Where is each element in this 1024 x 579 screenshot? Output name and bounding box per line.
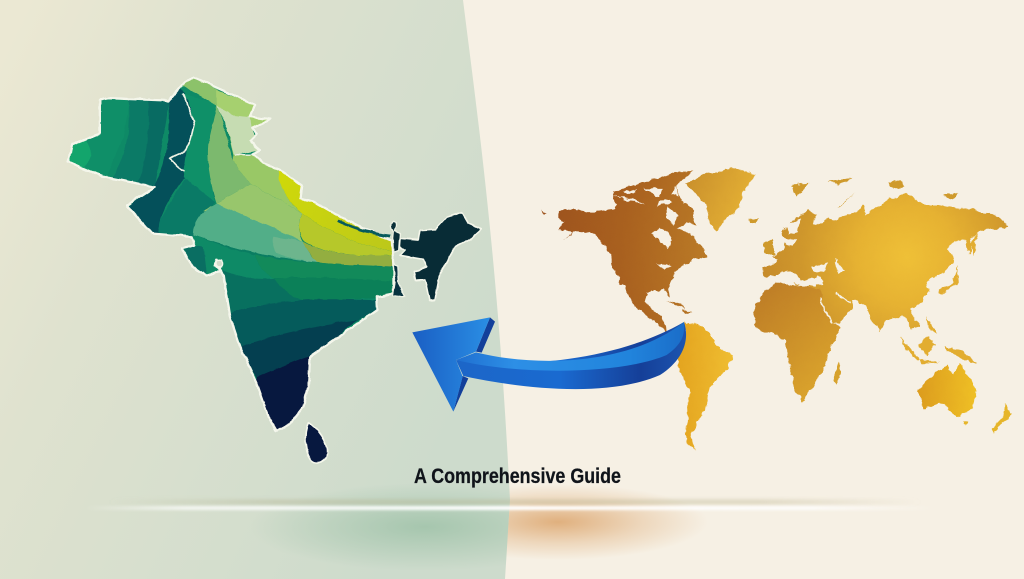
floor highlight line: [85, 506, 935, 510]
Gulf inlet: [216, 261, 223, 267]
Japan and islands of Southeast Asia: [900, 232, 978, 363]
map: world: [542, 168, 1012, 450]
region outline halo: [68, 77, 393, 431]
North America: [558, 172, 707, 334]
Iceland: [748, 217, 758, 224]
map: India and South Asia: [60, 70, 482, 463]
Bhutan sliver: [391, 221, 400, 252]
Greenland: [685, 168, 757, 232]
Australia: [918, 363, 977, 417]
New Zealand and Tasmania: [963, 403, 1012, 433]
Madagascar: [833, 362, 842, 385]
British Isles and northern islands: [763, 178, 958, 255]
background: sage left panel: [0, 0, 510, 579]
floor glow: green: [282, 492, 510, 562]
floor glow: orange: [507, 488, 694, 556]
caption: A Comprehensive Guide: [414, 465, 621, 488]
arrowhead dark side: [453, 317, 495, 412]
Caribbean and Hawaii: [542, 211, 693, 312]
white border outline: [68, 77, 393, 431]
arrow shaft top face: [456, 322, 684, 371]
northeast region: [399, 212, 482, 301]
Eurasia: [762, 193, 1008, 332]
coastal strip: [338, 221, 390, 236]
choropleth bands: [69, 78, 394, 430]
Red Sea and Persian Gulf: [820, 293, 851, 323]
small northern border line: [235, 153, 252, 157]
Africa: [753, 282, 842, 402]
inland seas, bays and straits: [613, 187, 947, 290]
arrow shaft lower face: [456, 322, 686, 389]
internal border west: [171, 94, 195, 172]
arrowhead front: [412, 317, 490, 412]
Sri Lanka: [305, 423, 328, 463]
curved blue arrow: [412, 317, 686, 412]
South America: [678, 322, 733, 450]
floor shadow line: [110, 500, 920, 504]
Bangladesh sliver: [393, 265, 405, 297]
